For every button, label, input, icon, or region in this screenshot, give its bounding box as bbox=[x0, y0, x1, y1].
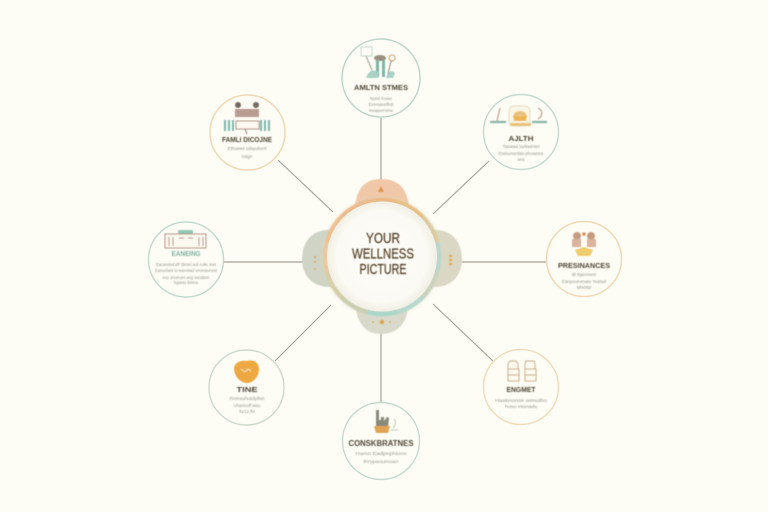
node: bottom right, engmet bbox=[484, 350, 558, 424]
node circle bbox=[148, 222, 224, 297]
heading: FAMLI DICOJNE bbox=[222, 135, 272, 144]
node circle bbox=[342, 402, 420, 480]
petal: top bbox=[355, 179, 409, 207]
hub disc bbox=[327, 202, 437, 312]
hub title: WELLNESS bbox=[352, 246, 414, 262]
description: Tatataa turkwintel bbox=[502, 144, 540, 149]
description: hoso irtonads bbox=[505, 404, 537, 409]
description: ient bbox=[518, 157, 525, 162]
description bbox=[498, 144, 544, 162]
description: exo onomont ang onndann bbox=[162, 275, 210, 280]
node: top left, family picture bbox=[210, 95, 285, 170]
heading: AJLTH bbox=[508, 134, 534, 143]
icon: figures and flower bbox=[572, 232, 596, 256]
description bbox=[155, 262, 218, 285]
description bbox=[228, 146, 267, 159]
hub title: PICTURE bbox=[360, 261, 406, 278]
node circle bbox=[209, 350, 284, 425]
description: thrypaoumoan bbox=[364, 459, 399, 464]
description bbox=[495, 398, 548, 409]
hub title: YOUR bbox=[366, 230, 400, 247]
description: Eanuolant to wanotad ononiavnest bbox=[155, 268, 218, 273]
node: top right, adjin bbox=[484, 94, 558, 170]
node: left, eaneing bbox=[148, 222, 224, 297]
icon: orange blob bbox=[234, 360, 259, 383]
description: Mhr050 bbox=[577, 285, 592, 290]
description: Emnsaveffnit bbox=[369, 102, 394, 107]
icon: table with figures bbox=[224, 102, 270, 134]
description: Ensluumenfalu phovantes bbox=[498, 151, 544, 156]
description bbox=[369, 96, 394, 113]
description: ristgn bbox=[242, 154, 253, 159]
node circle bbox=[546, 222, 622, 296]
node circle bbox=[484, 94, 558, 170]
description bbox=[356, 451, 406, 464]
description: Hasknonoir wimolho bbox=[495, 398, 548, 403]
description bbox=[230, 396, 265, 414]
heading: ENGMET bbox=[506, 385, 536, 394]
icon: plants and tools bbox=[361, 47, 395, 78]
heading: TINE bbox=[236, 385, 258, 394]
heading: CONSKBRATNES bbox=[348, 439, 414, 448]
description: Eanpourumatu Yeatud bbox=[562, 279, 607, 284]
heading: PRESINANCES bbox=[558, 261, 610, 270]
icon: cup on tray bbox=[490, 106, 547, 126]
petal: bottom bbox=[356, 308, 408, 334]
node: top, health states bbox=[342, 39, 420, 117]
description: fur12.fhl bbox=[239, 409, 255, 414]
icon: two storage boxes bbox=[508, 361, 536, 381]
description: Numl Kowe bbox=[370, 96, 393, 101]
hub ring bbox=[312, 187, 452, 327]
heading: EANEING bbox=[172, 249, 201, 258]
description: Ineaperrome bbox=[369, 108, 394, 113]
description bbox=[562, 272, 607, 290]
hub shadow bbox=[322, 197, 442, 317]
description: Retrashutdyllwt bbox=[230, 396, 265, 401]
description: Uharinoff wau bbox=[234, 403, 261, 408]
node circle bbox=[484, 350, 558, 424]
description: Hamo Eadpephions bbox=[356, 451, 406, 456]
node: right, presinances bbox=[546, 222, 622, 296]
node circle bbox=[342, 39, 420, 117]
node: bottom left, time bbox=[209, 350, 284, 425]
hub title bbox=[352, 230, 414, 278]
icon: framed panel bbox=[165, 230, 206, 248]
node circle bbox=[210, 95, 285, 170]
description: Ethuwwt sdayukerit bbox=[228, 146, 267, 151]
petal marks bbox=[314, 186, 452, 324]
description: bganto bmiva bbox=[174, 280, 199, 285]
icon: potted plant bbox=[374, 410, 398, 433]
description: Bl Nperment bbox=[572, 272, 597, 277]
petal: right bbox=[432, 230, 462, 287]
central hub bbox=[302, 179, 462, 334]
petal: left bbox=[302, 230, 332, 287]
node: bottom, considerations bbox=[342, 402, 420, 480]
heading: AMLTN STMES bbox=[354, 83, 408, 92]
connector lines bbox=[224, 118, 546, 403]
description: Eacasdod.dil' Bintel aul Aulie tnet bbox=[156, 262, 217, 267]
